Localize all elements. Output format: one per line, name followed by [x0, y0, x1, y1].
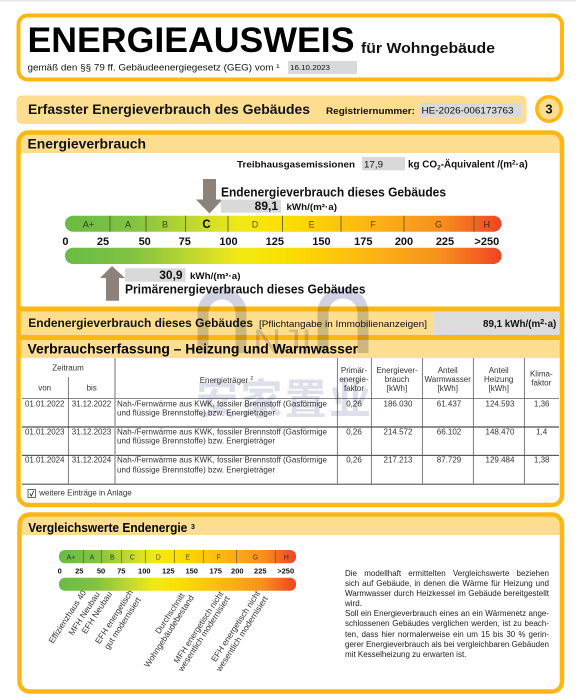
row 2023: 1,4	[536, 427, 548, 436]
row: final energy for advertisements: [Pflichtangabe in Immobilienanzeigen]	[259, 319, 427, 330]
efficiency class scale: D	[252, 220, 259, 230]
scale numbers: 75	[179, 236, 191, 248]
table header: Heizung	[484, 375, 513, 384]
row 2022: 31.12.2022	[72, 399, 112, 408]
arrow: primary energy marker	[100, 266, 125, 301]
table header	[38, 364, 553, 393]
row: final energy for advertisements: ·a)	[544, 319, 556, 330]
table header: Zeitraum	[52, 364, 84, 373]
final energy label: Endenergieverbrauch dieses Gebäudes	[221, 186, 446, 200]
row 2023: 214.572	[384, 427, 413, 436]
row 2023: 0,26	[346, 427, 362, 436]
efficiency class scale: F	[370, 220, 376, 230]
row 2024: Nah-/Fernwärme aus KWK, fossiler Brennstoff (Gasförmige	[117, 455, 328, 464]
efficiency class scale: G	[435, 220, 442, 230]
comparison explanatory text: gerer Energieverbrauch als bei vergleichbaren Gebäuden	[345, 640, 549, 649]
row 2022: 124.593	[486, 399, 515, 408]
scale numbers: >250	[474, 236, 499, 248]
comparison scale numbers: 25	[75, 567, 83, 576]
rotated building type labels: MFH energetisch nicht	[171, 589, 226, 665]
row 2023: 31.12.2023	[72, 427, 112, 436]
table header: [kWh]	[488, 384, 509, 393]
scale numbers: 50	[139, 236, 151, 248]
comparison explanatory text: ten, dass hier normalerweise ein um 15 bis 30 % gerin-	[345, 630, 549, 639]
efficiency class scale: E	[308, 220, 315, 230]
date field: 16.10.2023	[290, 65, 330, 72]
comparison scale: A	[90, 555, 95, 562]
comparison scale numbers: 150	[185, 567, 198, 576]
comparison scale: C	[130, 555, 135, 562]
scale numbers: 200	[395, 236, 413, 248]
comparison panel outline	[20, 514, 562, 692]
row 2024	[25, 455, 550, 474]
comparison scale: E	[185, 555, 190, 562]
row: final energy for advertisements	[20, 311, 560, 336]
page number badge: 3	[545, 102, 553, 116]
comparison scale numbers: 125	[162, 567, 175, 576]
table header: 2	[250, 376, 253, 382]
scale numbers: 225	[436, 236, 454, 248]
comparison explanatory text: wird.	[345, 599, 362, 608]
rotated building type labels: wesentlich modernisiert	[175, 594, 232, 674]
comparison scale: F	[217, 555, 221, 562]
greenhouse gas emissions: -Äquivalent /(m	[441, 160, 512, 170]
rotated building type labels: wesentlich modernisiert	[213, 594, 270, 674]
rotated building type labels: EFH energetisch nicht	[209, 588, 262, 664]
row 2024: 87.729	[437, 455, 462, 464]
watermark	[196, 293, 371, 423]
row 2023: 01.01.2023	[25, 427, 65, 436]
comparison scale numbers: 50	[97, 567, 105, 576]
comparison heading: 3	[191, 524, 195, 531]
greenhouse gas emissions: 2	[437, 164, 441, 172]
table header: faktor	[531, 379, 552, 388]
table header: energie-	[339, 375, 369, 384]
comparison scale numbers: 200	[231, 567, 244, 576]
primary energy label: Primärenergieverbrauch dieses Gebäudes	[125, 283, 366, 297]
consumption table	[22, 358, 559, 484]
comparison scale	[59, 550, 296, 563]
efficiency class scale: H	[484, 220, 490, 230]
table header: bis	[87, 384, 97, 393]
comparison explanatory text: sich auf Gebäude, in denen die Wärme für Heizung und	[345, 579, 549, 588]
table header: Primär-	[341, 366, 367, 375]
comparison gradient bar	[59, 578, 296, 591]
table header: faktor	[344, 384, 364, 393]
row: final energy for advertisements: Endenergieverbrauch dieses Gebäudes	[28, 316, 253, 330]
rotated building type labels: Wohngebäudebestand	[142, 593, 196, 669]
comparison scale numbers: 225	[254, 567, 267, 576]
comparison scale numbers: 75	[117, 567, 125, 576]
comparison scale: H	[284, 555, 289, 562]
primary energy label	[125, 268, 366, 297]
row 2023	[25, 427, 548, 446]
row 2022: und flüssige Brennstoffe) bzw. Energieträger	[117, 409, 275, 418]
comparison explanatory text: schlossenen Gebäudes verglichen werden, ist zu beach-	[345, 619, 549, 628]
rotated building type labels	[46, 588, 270, 674]
efficiency class scale: A+	[83, 220, 94, 230]
greenhouse gas emissions: 17,9	[364, 160, 383, 170]
scale numbers	[62, 236, 499, 248]
scale numbers: 100	[219, 236, 238, 248]
comparison scale numbers: 0	[58, 567, 62, 576]
section title bar	[16, 96, 526, 124]
table header: Energiever-	[376, 366, 418, 375]
rotated building type labels: MFH Neubau	[66, 590, 102, 637]
panel outline	[18, 132, 562, 505]
gradient bar	[65, 248, 502, 264]
header panel	[18, 16, 562, 80]
dividers	[20, 306, 560, 312]
greenhouse gas emissions: ·a)	[516, 160, 528, 170]
comparison heading: Vergleichswerte Endenergie	[28, 521, 187, 535]
row 2022: 61.437	[437, 399, 462, 408]
row 2022: 0,26	[346, 399, 362, 408]
legal basis line: gemäß den §§ 79 ff. Gebäudeenergiegesetz (GEG) vom ¹	[28, 62, 280, 72]
panel: energy consumption	[18, 132, 562, 505]
scale numbers: 25	[97, 236, 109, 248]
greenhouse gas emissions	[237, 157, 528, 172]
table header: von	[38, 384, 51, 393]
panel: comparison values	[20, 514, 562, 692]
row 2023: 66.102	[437, 427, 462, 436]
row 2022: 1,36	[534, 399, 550, 408]
table header: Klima-	[530, 370, 553, 379]
row 2023: 148.470	[486, 427, 515, 436]
row 2023: und flüssige Brennstoffe) bzw. Energieträger	[117, 436, 275, 446]
efficiency class scale: C	[202, 219, 211, 231]
scale numbers: 175	[354, 236, 372, 248]
table header: Energieträger	[200, 376, 248, 385]
efficiency class scale: B	[162, 220, 168, 230]
comparison scale: B	[110, 555, 115, 562]
rotated building type labels: EFH Neubau	[79, 589, 114, 636]
comparison explanatory text: Die modellhaft ermittelten Vergleichswerte beziehen	[345, 569, 549, 578]
row 2024: 1,38	[534, 455, 550, 464]
row: final energy for advertisements: 2	[540, 317, 544, 326]
table header: Anteil	[489, 366, 509, 375]
table header: brauch	[385, 375, 409, 384]
rotated building type labels: Effizienzhaus 40	[46, 588, 88, 645]
row 2022: 01.01.2022	[25, 399, 65, 408]
row 2022	[25, 399, 550, 418]
comparison scale: G	[253, 555, 258, 562]
row 2024: 129.484	[486, 455, 515, 464]
row: final energy for advertisements: 89,1 kWh/(m	[483, 319, 540, 330]
row 2023: Nah-/Fernwärme aus KWK, fossiler Brennstoff (Gasförmige	[117, 427, 328, 436]
row 2022: Nah-/Fernwärme aus KWK, fossiler Brennstoff (Gasförmige	[117, 399, 328, 408]
final energy label: kWh/(m²·a)	[286, 202, 337, 212]
row 2024: und flüssige Brennstoffe) bzw. Energieträger	[117, 465, 275, 474]
row 2024: 01.01.2024	[25, 455, 65, 464]
date field	[288, 61, 357, 74]
comparison scale: D	[156, 555, 161, 562]
checkbox: further entries: weitere Einträge in Anlage	[38, 489, 132, 498]
registration number: HE-2026-006173763	[422, 106, 514, 116]
greenhouse gas emissions: Treibhausgasemissionen	[237, 160, 355, 170]
row 2024: 0,26	[346, 455, 362, 464]
row 2024: 31.12.2024	[72, 455, 112, 464]
page number badge	[537, 97, 561, 121]
comparison scale: A+	[67, 555, 75, 562]
scale numbers: 150	[312, 236, 331, 248]
table header: Anteil	[438, 366, 458, 375]
scale numbers: 125	[266, 236, 284, 248]
scale numbers: 0	[62, 236, 68, 248]
efficiency class scale	[65, 216, 502, 232]
rotated building type labels: gut modernisiert	[102, 595, 143, 651]
rotated building type labels: EFH energetisch	[93, 588, 135, 646]
panel: energy consumption: Energieverbrauch	[28, 136, 146, 152]
comparison explanatory text: Warmwasser durch Heizkessel im Gebäude bereitgestellt	[345, 589, 549, 598]
row 2024: 217.213	[384, 455, 413, 464]
section title bar: Erfasster Energieverbrauch des Gebäudes	[28, 101, 310, 117]
final energy label	[221, 186, 446, 213]
table header: Warmwasser	[425, 375, 471, 384]
primary energy label: 30,9	[159, 268, 183, 282]
comparison explanatory text: mit Kesselheizung zu erwarten ist.	[345, 650, 466, 659]
comparison explanatory text	[345, 569, 549, 659]
comparison scale numbers: >250	[277, 567, 294, 576]
greenhouse gas emissions: kg CO	[408, 160, 437, 170]
consumption table heading: Verbrauchserfassung – Heizung und Warmwasser	[28, 341, 359, 357]
title: ENERGIEAUSWEIS	[28, 21, 354, 60]
subtitle: für Wohngebäude	[361, 40, 495, 57]
arrow: final energy marker	[196, 179, 222, 214]
registration number: Registriernummer:	[326, 106, 415, 117]
comparison scale numbers: 100	[138, 567, 151, 576]
registration number	[326, 103, 521, 117]
primary energy label: kWh/(m²·a)	[190, 271, 240, 281]
heading band	[20, 134, 560, 153]
rotated building type labels: Durchschnitt	[153, 591, 187, 636]
consumption table heading	[20, 340, 560, 358]
final energy label: 89,1	[255, 199, 278, 213]
comparison explanatory text: Soll ein Energieverbrauch eines an ein Wärmenetz ange-	[345, 609, 549, 618]
watermark: 安家置业	[196, 376, 371, 423]
watermark: NJI	[253, 323, 312, 361]
greenhouse gas emissions: 2	[512, 160, 516, 166]
table header: [kWh]	[437, 384, 458, 393]
table header: [kWh]	[387, 384, 407, 393]
row 2022: 186.030	[384, 399, 413, 408]
efficiency class scale: A	[125, 220, 131, 230]
comparison scale numbers	[58, 567, 294, 576]
comparison scale numbers: 175	[209, 567, 222, 576]
